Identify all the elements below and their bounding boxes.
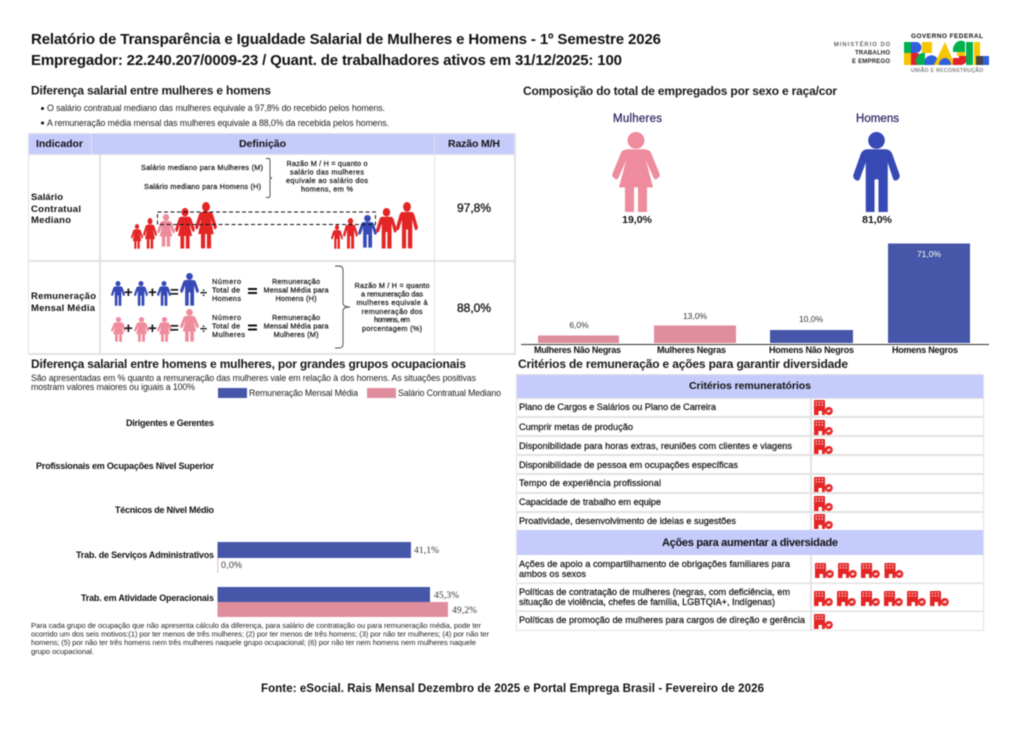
bar chart: raça/cor: 71,0% xyxy=(917,249,941,259)
table: critérios e ações: Políticas de promoção de mulheres para cargos de direção e gerência xyxy=(519,615,806,625)
definition: salário mediano: Razão M / H = quanto o xyxy=(286,159,368,168)
text block: bullets: O salário contratual mediano das mulheres equivale a 97,8% do recebido pelos homens. xyxy=(47,103,385,113)
definition: remuneração mulheres xyxy=(111,309,329,342)
title: Relatório de Transparência e Igualdade Salarial de Mulheres e Homens - 1º Semestre 2026 xyxy=(31,31,661,48)
text block: nota de rodapé: grupo ocupacional. xyxy=(31,647,94,656)
logo: ministério: MINISTÉRIO DO xyxy=(834,41,891,48)
panel: composição xyxy=(521,84,989,355)
definition: razão remuneração: remuneração dos xyxy=(362,307,423,316)
text block: explicação: São apresentadas em % quanto a remuneração das mulheres vale em relação à dos homens. As situações positivas xyxy=(31,373,477,383)
legend: Remuneração Mensal Média xyxy=(249,388,358,398)
definition: razão remuneração: a remuneração das xyxy=(361,290,423,298)
definition: razão remuneração xyxy=(335,266,430,348)
heading: Diferença salarial entre homens e mulheres, por grandes grupos ocupacionais xyxy=(31,357,466,371)
bar chart: grupos: Profissionais em Ocupações Nível Superior xyxy=(36,461,214,471)
bar chart: grupos: 45,3% xyxy=(434,591,459,601)
definition: salário mediano: salário das mulheres xyxy=(290,168,364,176)
text block: nota de rodapé xyxy=(31,621,490,656)
table: critérios e ações: Plano de Cargos e Salários ou Plano de Carreira xyxy=(519,402,717,412)
definition: remuneração homens xyxy=(111,273,329,306)
title: Empregador: 22.240.207/0009-23 / Quant. de trabalhadores ativos em 31/12/2025: 100 xyxy=(31,52,622,69)
table: indicadores: Razão M/H xyxy=(448,138,500,150)
logo: governo federal: UNIÃO E RECONSTRUÇÃO xyxy=(911,67,983,74)
label: homens: Homens xyxy=(856,113,899,125)
bar chart: grupos: Trab. de Serviços Administrativos xyxy=(76,550,214,560)
bar chart: grupos xyxy=(36,418,477,617)
bar chart: grupos: Técnicos de Nível Médio xyxy=(115,505,214,515)
definition: remuneração homens: Total de xyxy=(212,286,240,294)
definition: remuneração mulheres: Remuneração xyxy=(272,313,320,322)
table: critérios e ações: Disponibilidade de pessoa em ocupações específicas xyxy=(519,460,738,470)
table: critérios e ações: Cumprir metas de produção xyxy=(519,422,633,432)
definition: remuneração mulheres: Mulheres xyxy=(212,330,245,339)
panel: diferença salarial xyxy=(28,84,516,355)
table: indicadores xyxy=(28,133,516,355)
bar chart: raça/cor: 10,0% xyxy=(799,314,823,324)
definition: remuneração mulheres: Mulheres (M) xyxy=(274,330,318,339)
table: critérios e ações: Disponibilidade para horas extras, reuniões com clientes e viagens xyxy=(519,441,792,451)
definition: salário mediano: Salário mediano para Homens (H) xyxy=(144,182,261,191)
table: critérios e ações: Políticas de contratação de mulheres (negras, com deficiência, em xyxy=(519,587,790,597)
bar chart: raça/cor xyxy=(521,244,989,355)
panel: critérios xyxy=(516,357,984,631)
row label: salário contratual mediano: Salário xyxy=(31,192,63,203)
heading: Critérios de remuneração e ações para garantir diversidade xyxy=(518,357,848,371)
heading: Composição do total de empregados por sexo e raça/cor xyxy=(523,84,837,98)
bar chart: grupos: Dirigentes e Gerentes xyxy=(126,418,214,428)
definition: remuneração homens: Número xyxy=(212,277,241,286)
value: 97,8%: 97,8% xyxy=(457,201,491,215)
panel: grupos ocupacionais xyxy=(31,357,501,656)
definition: salário mediano: homens, em % xyxy=(301,184,354,194)
icons: homens por salário xyxy=(331,202,418,249)
logo: ministério xyxy=(834,41,891,65)
logo: governo federal: GOVERNO FEDERAL xyxy=(911,33,983,40)
definition: remuneração mulheres: Número xyxy=(212,313,241,322)
header: critérios remuneratórios: Critérios remuneratórios xyxy=(689,380,811,392)
table: critérios e ações: situação de violência, chefes de família, LGBTQIA+, Indígenas) xyxy=(519,597,775,607)
bar chart: grupos: Trab. em Atividade Operacionais xyxy=(81,593,214,603)
definition: remuneração homens: = xyxy=(170,284,179,301)
logo: ministério: E EMPREGO xyxy=(852,59,890,65)
definition: razão remuneração: Razão M / H = quanto xyxy=(354,281,430,290)
fonte: Fonte: eSocial. Rais Mensal Dezembro de 2025 e Portal Emprega Brasil - Fevereiro de 2026 xyxy=(261,683,764,695)
table: indicadores: Definição xyxy=(239,138,286,150)
row label: remuneração mensal média: Mensal Média xyxy=(31,303,96,314)
text block: nota de rodapé: Para cada grupo de ocupação que não apresenta cálculo da diferença, para salário de contratação ou para remuneração média, pode ter xyxy=(31,621,482,630)
definition: remuneração homens: + xyxy=(148,284,157,301)
value: 19,0%: 19,0% xyxy=(622,214,653,226)
logo: ministério: TRABALHO xyxy=(855,50,890,56)
title xyxy=(31,31,661,69)
bar chart: raça/cor: 13,0% xyxy=(683,311,707,321)
bar chart: grupos: 0,0% xyxy=(221,560,242,570)
icon: mulher xyxy=(612,132,660,212)
bar chart: grupos: 49,2% xyxy=(452,606,477,616)
definition: remuneração mulheres: + xyxy=(124,320,133,337)
table: critérios e ações: ambos os sexos xyxy=(519,569,586,579)
table: critérios e ações: Ações de apoio a compartilhamento de obrigações familiares para xyxy=(519,559,791,569)
row label: remuneração mensal média xyxy=(31,291,96,314)
bar chart: raça/cor: Homens Não Negros xyxy=(769,345,854,355)
bar chart: raça/cor: Mulheres Negras xyxy=(657,345,726,355)
definition: remuneração mulheres: Mensal Média para xyxy=(264,322,329,330)
bar chart: raça/cor: Mulheres Não Negras xyxy=(534,345,621,355)
text block: explicação: mostram valores maiores ou iguais a 100% xyxy=(31,382,195,392)
text block: bullets: A remuneração média mensal das mulheres equivale a 88,0% da recebida pelos homens. xyxy=(47,118,389,128)
table: critérios e ações: Capacidade de trabalho em equipe xyxy=(519,497,661,507)
table: indicadores: Indicador xyxy=(36,138,83,150)
definition: salário mediano: equivale ao salário dos xyxy=(286,176,368,185)
legend: Salário Contratual Mediano xyxy=(398,388,501,398)
value: 81,0%: 81,0% xyxy=(862,214,893,226)
text block: explicação xyxy=(31,373,477,392)
row label: salário contratual mediano: Contratual xyxy=(31,204,81,215)
text block: bullets xyxy=(41,103,389,128)
bar chart: raça/cor: Homens Negros xyxy=(892,345,958,355)
logo: governo federal xyxy=(904,33,989,74)
definition: remuneração homens: Mensal Média para xyxy=(264,286,329,294)
definition: remuneração homens: Homens xyxy=(212,294,241,303)
definition: razão remuneração: porcentagem (%) xyxy=(362,324,422,333)
icons: empresas xyxy=(814,400,949,629)
definition: razão remuneração: mulheres equivale à xyxy=(356,298,428,307)
icons: mulheres por salário xyxy=(131,202,217,249)
definition: remuneração mulheres: Total de xyxy=(212,322,240,330)
row label: salário contratual mediano xyxy=(31,192,81,226)
definition: remuneração homens: Homens (H) xyxy=(276,294,316,303)
definition: razão remuneração: homens, em xyxy=(374,315,410,324)
legend xyxy=(218,388,501,398)
row label: salário contratual mediano: Mediano xyxy=(31,215,71,226)
definition: salário mediano xyxy=(141,158,368,198)
table: critérios e ações: Proatividade, desenvolvimento de ideias e sugestões xyxy=(519,516,736,526)
header: ações para aumentar a diversidade: Ações para aumentar a diversidade xyxy=(662,537,838,549)
value: 88,0%: 88,0% xyxy=(457,301,491,315)
icon: homem xyxy=(853,132,900,212)
text block: nota de rodapé: homens; (5) por não ter três homens nem três mulheres naquele grupo ocupacional; (6) por não ter nem homens nem mulheres naquele xyxy=(31,638,476,647)
label: mulheres: Mulheres xyxy=(613,113,662,125)
definition: remuneração mulheres: ÷ xyxy=(200,321,207,336)
definition: remuneração mulheres: = xyxy=(170,320,179,337)
definition: remuneração homens: + xyxy=(124,284,133,301)
definition: remuneração mulheres: + xyxy=(148,320,157,337)
heading: Diferença salarial entre mulheres e homens xyxy=(31,84,271,98)
text block: nota de rodapé: ocorrido um dos seis motivos:(1) por ter menos de três mulheres; (2) por ter menos de três homens; (3) por não ter mulheres; (4) por não ter xyxy=(31,630,490,638)
logo: governo federal: BRASIL xyxy=(904,38,989,68)
definition: remuneração homens: ÷ xyxy=(200,285,207,300)
bar chart: grupos: 41,1% xyxy=(414,546,439,556)
bar chart: raça/cor: 6,0% xyxy=(569,320,589,330)
definition: remuneração homens: Remuneração xyxy=(272,277,320,286)
table: critérios e ações xyxy=(516,374,984,631)
table: critérios e ações: Tempo de experiência profissional xyxy=(519,478,661,488)
row label: remuneração mensal média: Remuneração xyxy=(31,291,96,302)
definition: salário mediano: Salário mediano para Mulheres (M) xyxy=(141,163,263,172)
